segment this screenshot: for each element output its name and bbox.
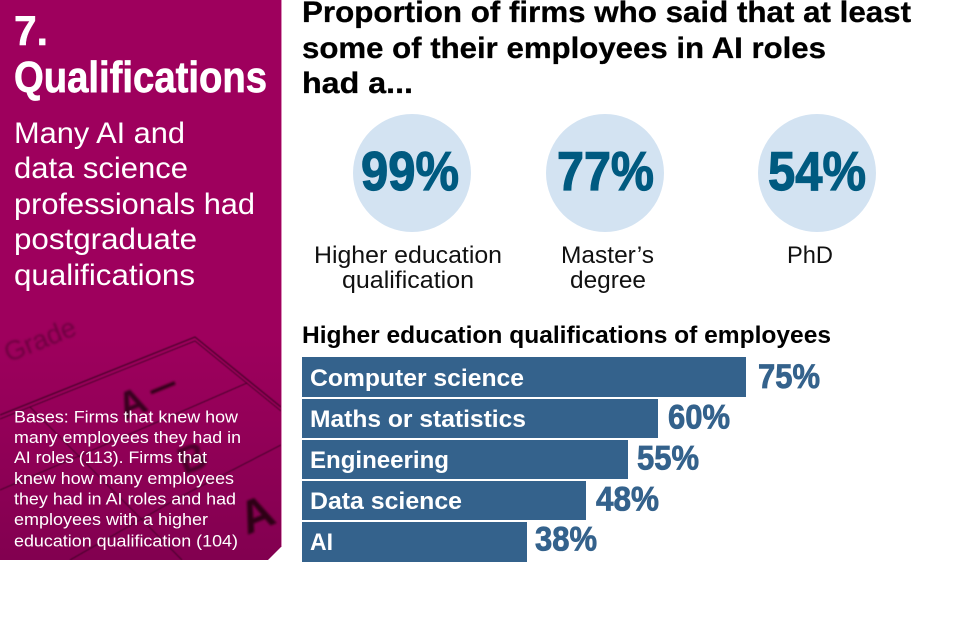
subtitle: Many AI and (14, 117, 185, 150)
bases note: AI roles (113). Firms that (14, 448, 207, 467)
stat: PhD: PhD (787, 242, 833, 269)
stat: master's degree: degree (570, 267, 646, 294)
bar: maths or statistics: 60% (668, 398, 730, 436)
subtitle: postgraduate (14, 223, 197, 256)
bar: computer science (302, 357, 820, 397)
bar: AI (302, 520, 597, 562)
stat: higher education qualification (314, 114, 502, 294)
heading (302, 0, 911, 100)
section title: Qualifications (14, 53, 267, 102)
bases note: knew how many employees (14, 469, 234, 488)
bases note: employees with a higher (14, 510, 208, 529)
bar: maths or statistics (302, 398, 730, 438)
subtitle: professionals had (14, 188, 255, 221)
bar: engineering (302, 440, 699, 479)
stat: master's degree: 77% (557, 140, 654, 202)
photo: grade sheet (0, 312, 282, 560)
stat: higher education qualification: Higher education (314, 242, 502, 269)
stat: master's degree: Master’s (561, 242, 654, 269)
photo: grade sheet: Grade (0, 312, 80, 368)
stat: PhD (758, 114, 876, 269)
photo: grade sheet: A (112, 379, 153, 429)
panel edge line (281, 0, 282, 547)
heading: had a... (302, 67, 413, 100)
bar: computer science: Computer science (310, 365, 524, 392)
subtitle (14, 117, 255, 292)
bar chart heading: Higher education qualifications of employees (302, 322, 831, 349)
bar: data science (302, 480, 659, 520)
subtitle: qualifications (14, 259, 195, 292)
panel: qualifications sidebar (0, 0, 282, 560)
heading: some of their employees in AI roles (302, 32, 826, 65)
bases note: education qualification (104) (14, 532, 238, 550)
bar: data science: 48% (596, 480, 659, 518)
bar: computer science: 75% (758, 358, 820, 396)
stat: higher education qualification: 99% (361, 140, 459, 202)
section number: 7. (14, 7, 48, 54)
bases note: they had in AI roles and had (14, 490, 236, 508)
photo: grade sheet: A (231, 484, 282, 544)
bar chart (302, 357, 820, 562)
stat: master's degree (546, 114, 664, 294)
bar: engineering: Engineering (310, 447, 449, 474)
subtitle: data science (14, 152, 188, 185)
panel background (0, 0, 281, 560)
bases note: many employees they had in (14, 428, 241, 447)
bar: AI: 38% (535, 520, 597, 558)
bases note (14, 408, 241, 550)
bases note: Bases: Firms that knew how (14, 408, 239, 426)
bar: AI: AI (310, 529, 333, 556)
bar: maths or statistics: Maths or statistics (310, 406, 526, 433)
bar: data science: Data science (310, 488, 462, 515)
stat: PhD: 54% (768, 140, 866, 202)
bar: engineering: 55% (637, 440, 699, 478)
photo: grade sheet: B (172, 434, 213, 483)
stat: higher education qualification: qualification (342, 267, 474, 294)
